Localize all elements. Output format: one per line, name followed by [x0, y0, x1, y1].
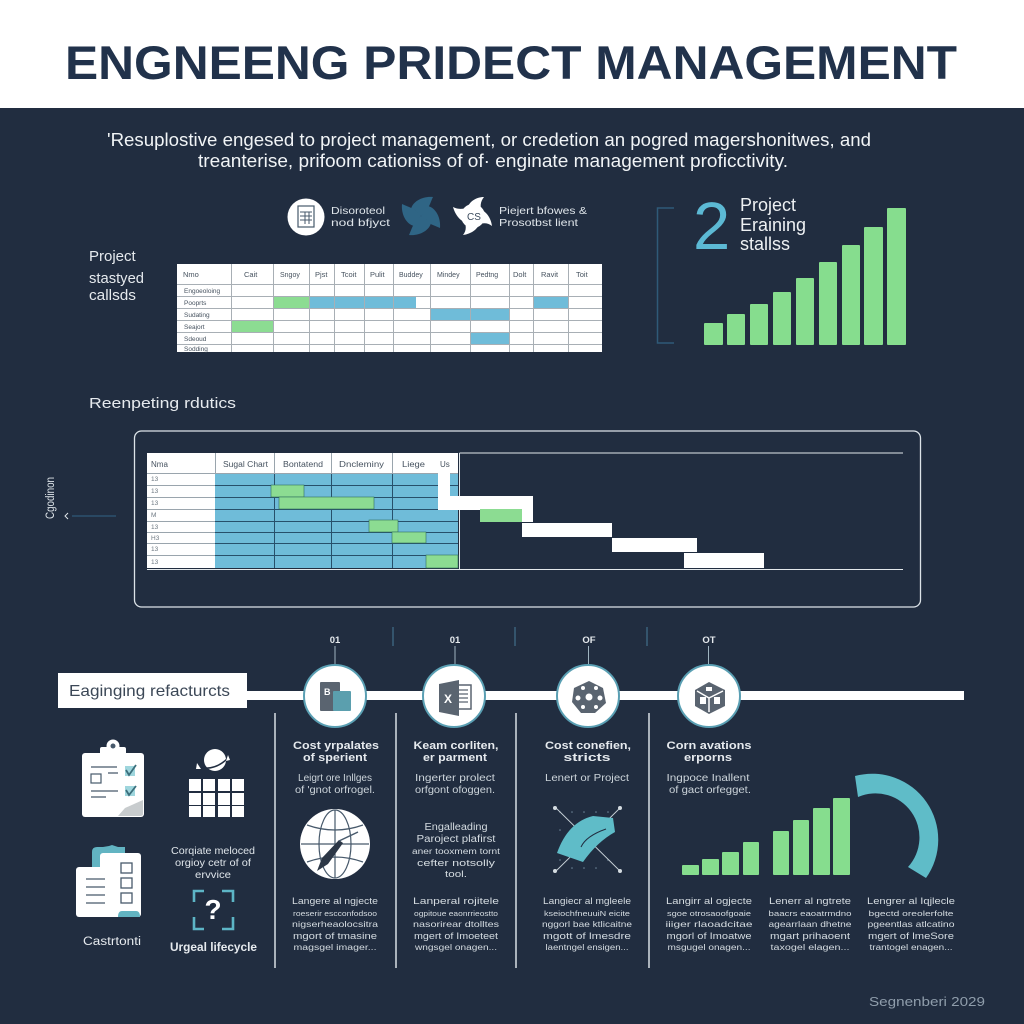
column 4 body: msgugel onagen...: [668, 943, 750, 952]
column 4 text: Corn avations: [666, 740, 752, 752]
column 4 text: [666, 740, 752, 796]
bracket: [658, 208, 674, 343]
column 2 text: orfgont ofoggen.: [415, 785, 495, 796]
gantt table top: Pedtng: [476, 272, 498, 279]
step 3 icon: [557, 665, 619, 727]
gantt table top: Tcoit: [341, 270, 357, 279]
column 2 body: nasorirear dtolltes: [413, 919, 499, 929]
gantt table: 13: [151, 476, 159, 483]
column 3 body: kseiochfneuuiN eicite: [544, 909, 630, 918]
gantt table top: Pooprts: [184, 300, 207, 307]
step 1 icon: [304, 665, 366, 727]
label: project: [499, 205, 587, 229]
icon: white pinwheel: CS: [467, 212, 481, 223]
gantt table top: Seajort: [184, 324, 205, 331]
gantt table top: Engoeoloing: [184, 288, 221, 295]
stat: big number and label: stallss: [740, 234, 790, 254]
label: document: nod bfjyct: [331, 217, 390, 229]
column 6 body: bgectd oreolerfolte: [868, 909, 954, 918]
side label with pointer: [45, 477, 116, 519]
step 4 icon: [678, 665, 740, 727]
column 3 text: stricts: [564, 752, 610, 764]
column 3 body: Langiecr al mgleele: [543, 896, 631, 907]
gantt table: [147, 453, 458, 568]
step 2 icon: [423, 665, 485, 727]
gantt axis lines: [147, 453, 903, 570]
intro text: treanterise, prifoom cationiss of of· enginate management proficctivity.: [198, 151, 788, 171]
step 1 icon: B: [324, 687, 331, 697]
gantt table top: Buddey: [399, 272, 423, 279]
step 2 icon: X: [444, 692, 452, 706]
intro text: 'Resuplostive engesed to project management, or credetion an pogred magershonitwes, and: [107, 130, 871, 150]
side label: project status: Project: [89, 248, 137, 265]
gantt table: Us: [440, 460, 450, 469]
gantt table top: Nmo: [183, 270, 199, 279]
gantt table top: Sudating: [184, 312, 210, 319]
gantt table: 13: [151, 500, 159, 507]
gantt table: Sugal Chart: [223, 460, 269, 469]
icon: clipboard checklist: [82, 740, 144, 817]
column 1 text: Cost yrpalates: [293, 740, 379, 752]
stat: big number and label: 2: [693, 189, 730, 264]
column 2 text: er parment: [423, 752, 487, 764]
footer date: Segnenberi 2029: [869, 994, 985, 1009]
column 1 body: roeserir escconfodsoo: [293, 909, 377, 918]
column 3 body: nggorl bae ktlicaitne: [542, 919, 632, 929]
icon: teal gauge: [553, 806, 622, 873]
title banner: [0, 0, 1024, 108]
gantt table: Nma: [151, 460, 168, 469]
column 5 body: Lenerr al ngtrete: [769, 896, 851, 907]
gantt table top: [177, 264, 602, 353]
gantt green bars: [271, 485, 458, 568]
icon: planet calendar: [189, 749, 244, 817]
column 2 text: [414, 740, 498, 796]
column 1 text: of 'gnot orfrogel.: [295, 785, 375, 796]
gantt table: H3: [151, 535, 160, 542]
gantt green bar right: [480, 509, 522, 522]
caption: planet: orgioy cetr of of: [175, 857, 251, 869]
column 2 middle text: [412, 822, 501, 880]
column 3 text: [545, 740, 631, 784]
section heading: Reenpeting rdutics: [89, 395, 236, 412]
side label with pointer: Cgodinon: [45, 477, 57, 519]
column 2 body: [413, 896, 499, 952]
column 5 body: [768, 896, 852, 952]
column 3 body: laentngel ensigen...: [546, 943, 628, 952]
column 2 body: Lanperal rojitele: [413, 896, 499, 907]
column 3 body: mgott of lmesdre: [543, 931, 631, 942]
column 4 body: iiiger rlaoadcitae: [666, 919, 753, 929]
column 4 body: sgoe otrosaoofgoaie: [667, 909, 751, 918]
timeline numbers and ticks: [330, 635, 716, 646]
icon: folder checklist: [76, 845, 141, 917]
gantt table top: Toit: [576, 270, 589, 279]
column 4 text: Ingpoce Inallent: [666, 773, 750, 784]
column 2 middle text: cefter notsolly: [417, 858, 496, 868]
gantt table top: Sodding: [184, 346, 208, 353]
gantt table top: Pjst: [315, 270, 328, 279]
column 3 body: [542, 896, 632, 952]
bar chart top: [704, 208, 906, 345]
gantt table top: Dolt: [513, 270, 527, 279]
column 4 body: [666, 896, 753, 952]
column 5 body: mgart prihaoent: [770, 931, 850, 942]
column 5 body: taxogel elagen...: [770, 943, 850, 952]
intro text: [107, 130, 871, 171]
bar chart bottom: [682, 798, 850, 875]
timeline label: [58, 673, 247, 708]
column 1 body: [292, 896, 378, 952]
gantt bars top: [231, 296, 568, 344]
column 1 text: [293, 740, 379, 796]
column 3 text: Cost conefien,: [545, 740, 631, 752]
gantt table: 13: [151, 488, 159, 495]
column 1 text: of sperient: [303, 752, 367, 764]
side label: project status: [89, 248, 144, 304]
caption: planet: [171, 845, 255, 881]
column 2 middle text: aner tooxmem tornt: [412, 847, 501, 856]
column 2 middle text: Engalleading: [424, 822, 488, 833]
column 6 body: [867, 896, 955, 952]
gantt table: Bontatend: [283, 460, 323, 469]
column 4 text: erporns: [684, 752, 732, 764]
icon: question bracket: ?: [204, 894, 222, 925]
side label: project status: callsds: [89, 287, 136, 304]
column 6 body: mgert of lmeSore: [868, 931, 954, 942]
column 6 body: trantogel enagen...: [870, 943, 952, 952]
timeline numbers and ticks: OT: [702, 635, 716, 646]
gantt table top: Sdeoud: [184, 336, 207, 343]
column 6 body: Lengrer al Iqjlecle: [867, 896, 955, 907]
column 1 body: nigserheaolocsitra: [292, 919, 378, 929]
column 2 middle text: Paroject plafirst: [416, 834, 496, 845]
stat: big number and label: Project: [740, 195, 796, 215]
timeline: [58, 627, 964, 727]
column 4 body: mgorl of Imoatwe: [666, 931, 752, 942]
column 2 middle text: tool.: [445, 869, 467, 880]
gantt table top: Pulit: [370, 270, 386, 279]
column 1 body: Langere al ngjecte: [292, 896, 378, 907]
column 4 text: of gact orfegget.: [669, 785, 751, 796]
column 2 body: mgert of Imoeteet: [414, 931, 498, 942]
timeline numbers and ticks: 01: [450, 635, 461, 646]
gantt white bars: [438, 473, 764, 568]
label: project: Piejert bfowes &: [499, 205, 587, 217]
label: project: Prosotbst lient: [499, 217, 578, 229]
column 2 text: Ingerter prolect: [415, 773, 495, 784]
column 4 body: Langirr al ogjecte: [666, 896, 752, 907]
column 3 text: Lenert or Project: [545, 773, 629, 784]
column 5 body: baacrs eaoatrmdno: [768, 909, 852, 918]
timeline label: Eaginging refacturcts: [69, 683, 230, 700]
label: document: Disoroteol: [331, 205, 385, 217]
stat: big number and label: [693, 189, 806, 264]
icon: blue pinwheel: [402, 197, 440, 235]
icon: document circle: [288, 198, 324, 236]
column 1 body: magsgel imager...: [294, 943, 376, 952]
gantt table: Liege: [402, 460, 426, 469]
gantt table: 13: [151, 559, 159, 566]
column dividers: [275, 713, 649, 968]
panel: large gantt: [134, 431, 920, 607]
column 1 text: Leigrt ore Inllges: [298, 773, 372, 784]
teal arc gauge: [855, 774, 938, 878]
column 6 body: pgeentlas atlcatino: [868, 919, 955, 929]
icon: globe: [300, 809, 370, 879]
stat: big number and label: Eraining: [740, 215, 806, 235]
gantt table: 13: [151, 546, 159, 553]
title banner: ENGNEENG PRIDECT MANAGEMENT: [65, 36, 957, 89]
caption: planet: Corqiate meloced: [171, 845, 255, 857]
side label: project status: stastyed: [89, 270, 144, 287]
column 5 body: agearrlaan dhetne: [768, 919, 852, 929]
timeline numbers and ticks: 01: [330, 635, 341, 646]
label: document: [331, 205, 390, 229]
gantt table: Dncleminy: [339, 460, 384, 469]
timeline numbers and ticks: OF: [582, 635, 596, 646]
gantt table top: Mindey: [437, 272, 460, 279]
column 2 body: ogpitoue eaonrrieostto: [414, 909, 498, 918]
icon: white pinwheel: [453, 197, 492, 235]
icon: question bracket: [194, 891, 233, 929]
caption: folder: Castrtonti: [83, 936, 141, 948]
caption: planet: ervvice: [195, 869, 231, 881]
column 1 body: mgort of tmasine: [293, 931, 377, 942]
icon row with labels: [288, 197, 587, 236]
gantt table: M: [151, 512, 156, 519]
gantt table top: Sngoy: [280, 272, 300, 279]
gantt table top: Ravit: [541, 270, 559, 279]
column 2 body: wngsgel onagen...: [414, 943, 497, 952]
caption: lifecycle: Urgeal lifecycle: [170, 942, 257, 954]
gantt table: 13: [151, 524, 159, 531]
gantt table top: Cait: [244, 270, 258, 279]
column 2 text: Keam corliten,: [414, 740, 498, 752]
